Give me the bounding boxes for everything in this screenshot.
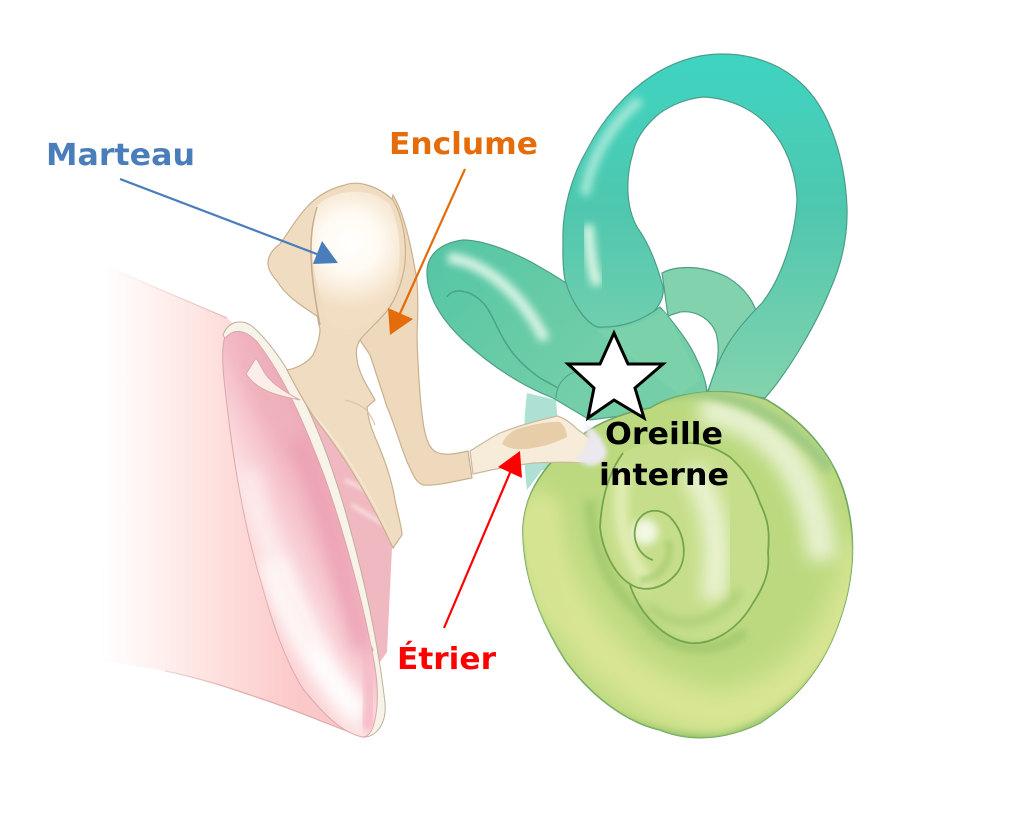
stapes (étrier) xyxy=(470,416,597,474)
label: Étrier: Étrier xyxy=(397,641,496,677)
illustration: ear canal and eardrum xyxy=(100,266,402,737)
label: Marteau: Marteau xyxy=(46,138,195,173)
eardrum xyxy=(223,322,385,737)
semicircular canal: lateral loop xyxy=(662,267,790,398)
canal highlights xyxy=(585,100,640,195)
vestibule window patch xyxy=(524,393,562,490)
incus (enclume) xyxy=(360,195,472,485)
label: Enclume: Enclume xyxy=(389,127,538,162)
arrow: Marteau xyxy=(120,179,338,264)
cochlea xyxy=(523,392,869,740)
semicircular canal: posterior ampulla and vestibule xyxy=(427,240,707,420)
label: Oreille interne: Oreille xyxy=(605,417,723,452)
malleus (marteau) xyxy=(268,183,405,548)
ear canal skin xyxy=(100,266,385,737)
tympanic pink membrane behind the rim xyxy=(300,400,402,665)
icon: star xyxy=(568,333,663,418)
illustration: inner ear xyxy=(427,54,869,740)
inner turn xyxy=(600,442,769,643)
illustration: ossicles xyxy=(268,183,607,548)
spiral lines xyxy=(600,453,684,589)
label: Oreille interne xyxy=(599,417,729,493)
label: Oreille interne: interne xyxy=(599,458,729,493)
stapes footplate xyxy=(575,424,607,466)
arrow: Enclume xyxy=(388,169,465,335)
malleus head highlight xyxy=(311,192,400,329)
arrow: Étrier xyxy=(444,451,522,628)
semicircular canal: superior ring xyxy=(563,54,847,398)
